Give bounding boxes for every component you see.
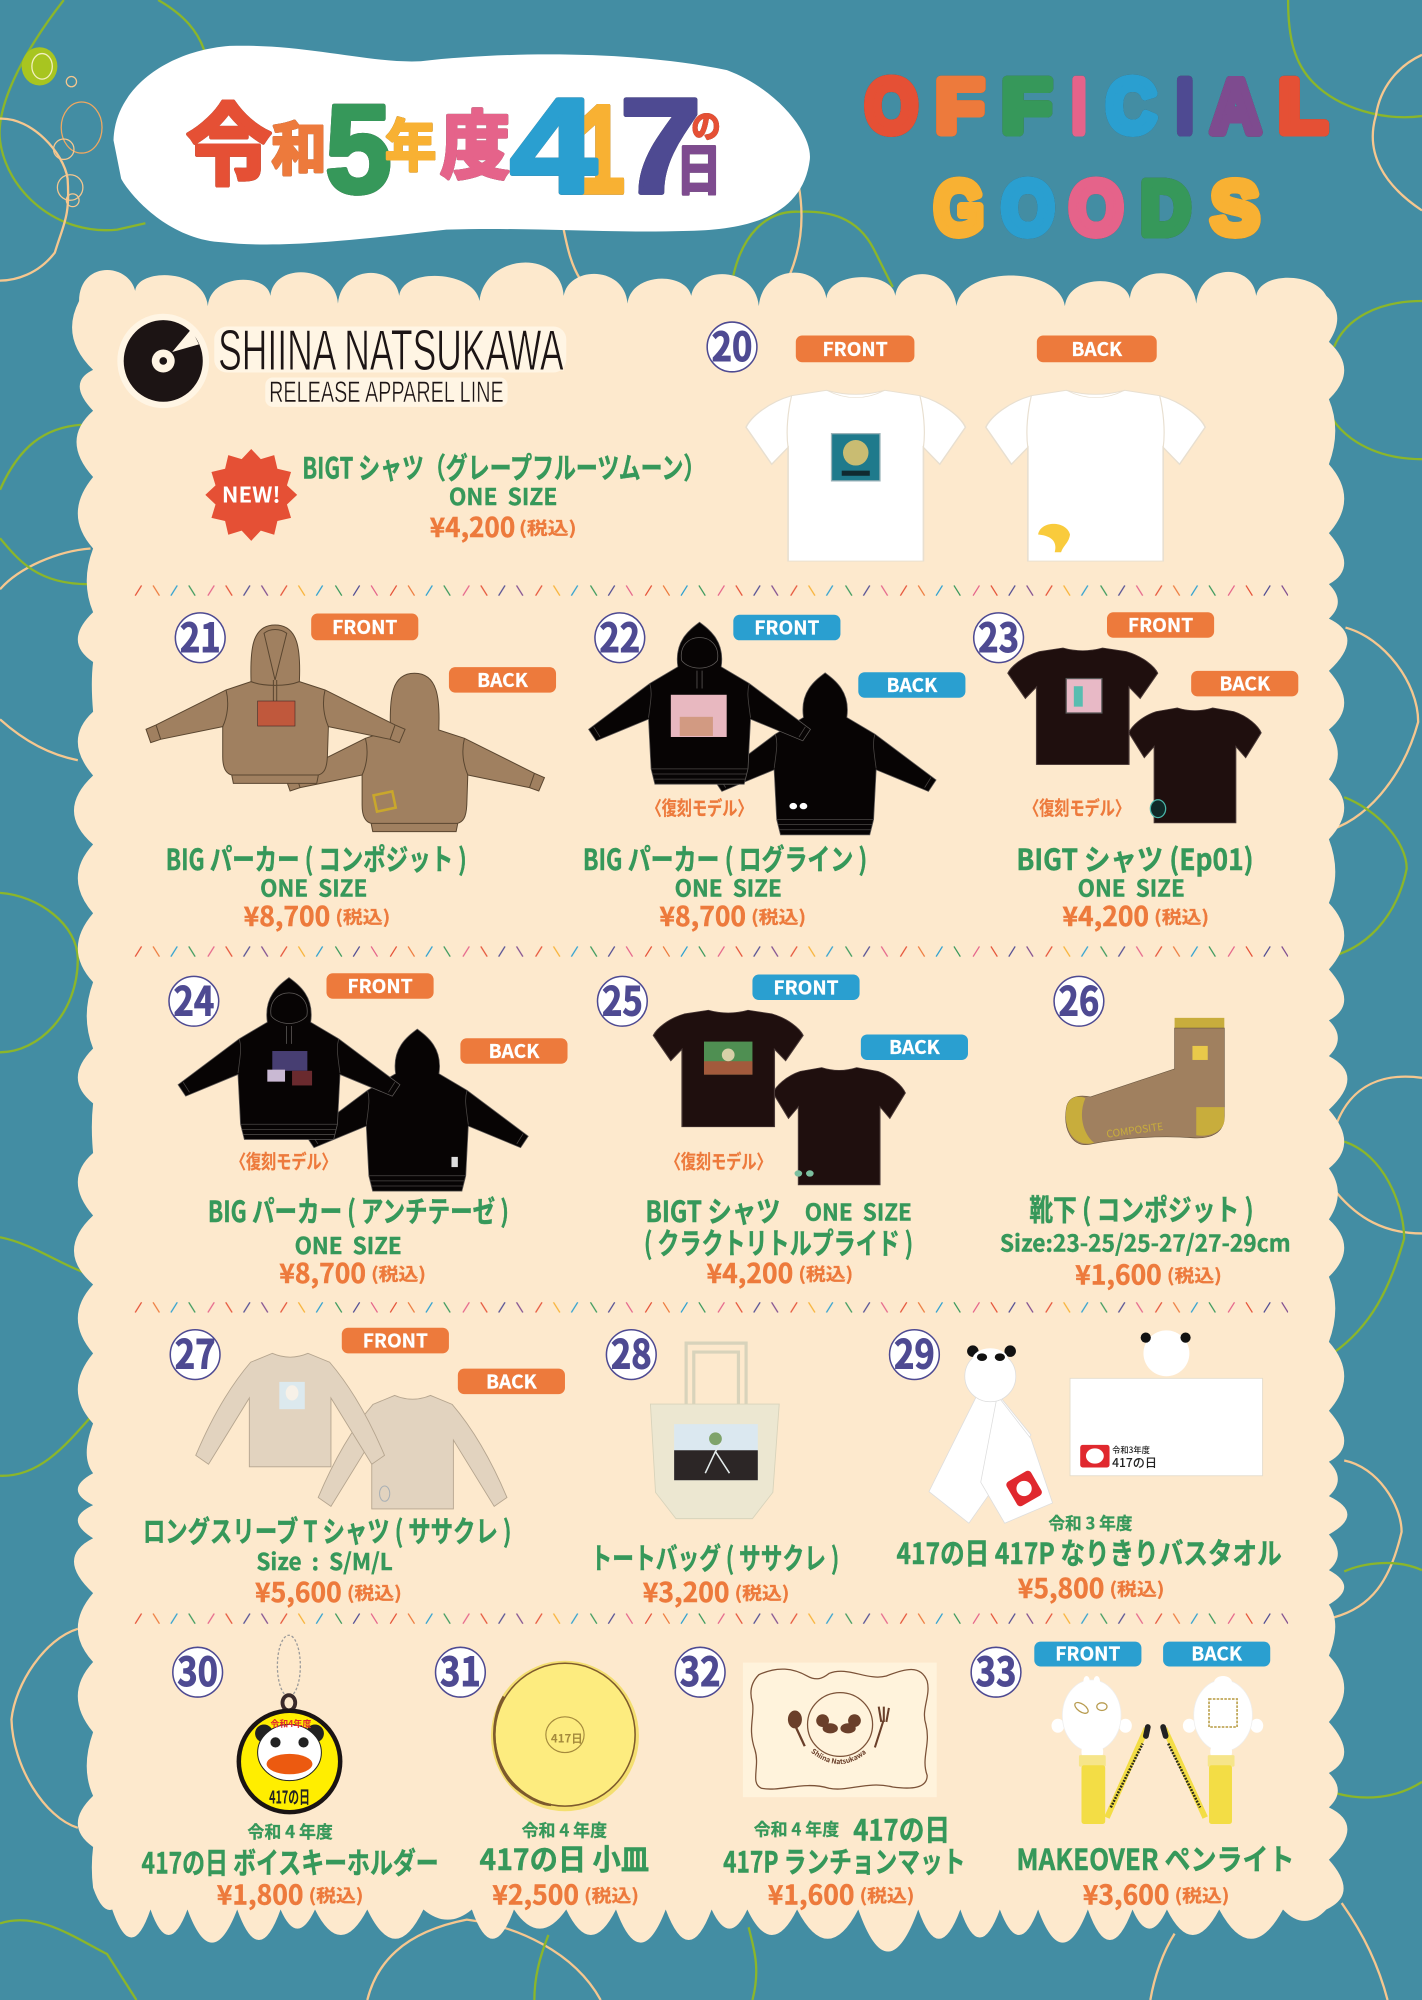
label BACK [458, 1366, 565, 1394]
label BACK: BACK [1219, 669, 1271, 697]
hoodie back [306, 1029, 528, 1191]
reissue note 24: 〈復刻モデル〉 [231, 1146, 337, 1174]
price 26 [1075, 1253, 1222, 1292]
number badge 31: 31 [440, 1641, 481, 1698]
price 26: ¥1,600 [1075, 1253, 1162, 1292]
label BACK [1163, 1639, 1270, 1667]
label FRONT: FRONT [1055, 1639, 1121, 1667]
price 22: ¥8,700 [659, 895, 746, 934]
price 33 [1083, 1873, 1229, 1912]
item 26: 靴下 コンポジット [1000, 970, 1291, 1292]
product name 24: BIG パーカー ( アンチテーゼ ) [208, 1189, 509, 1231]
number badge 23: 23 [978, 607, 1019, 664]
item 22: BIG パーカー ログライン [583, 607, 965, 934]
logo: SHIINA NATSUKAWA wordmark: RELEASE APPAREL LINE [269, 376, 504, 409]
item 23: BIGT シャツ Ep01 [974, 607, 1298, 934]
product name 25: BIGT シャツ [645, 1189, 781, 1231]
label BACK: BACK [1191, 1639, 1243, 1667]
label FRONT: FRONT [347, 971, 413, 999]
title: 令和5年度417の日: 4 [510, 71, 597, 222]
key holder [237, 1635, 342, 1814]
title: OFFICIAL GOODS: L [1279, 64, 1327, 148]
label BACK: BACK [486, 1366, 538, 1394]
product subname 25: ( クラクトリトルプライド ) [644, 1221, 913, 1263]
towel flat: 令和3年度 [1112, 1444, 1150, 1456]
item 27: ロングスリーブ T シャツ ササクレ [143, 1324, 565, 1610]
tote bag [650, 1343, 779, 1519]
label FRONT [796, 334, 914, 362]
hoodie front [146, 625, 405, 783]
price 20: ¥4,200 [430, 506, 515, 545]
towel flat [1070, 1330, 1263, 1476]
price 33: ¥3,600 [1083, 1873, 1169, 1912]
tee back [1129, 708, 1261, 823]
title: 令和5年度417の日: 度 [440, 87, 510, 194]
price 30: ¥1,800 [217, 1873, 304, 1912]
title: OFFICIAL GOODS: O [1069, 166, 1123, 250]
title: OFFICIAL GOODS: F [1002, 64, 1052, 148]
icon: lime bubble [22, 47, 57, 85]
label BACK [861, 1032, 968, 1060]
price 25: ¥4,200 [707, 1252, 793, 1291]
title: 令和5年度417の日: の [691, 102, 721, 148]
label FRONT: FRONT [754, 613, 820, 641]
logo: SHIINA NATSUKAWA wordmark: SHIINA NATSUKAWA [218, 319, 564, 383]
title: 令和5年度417の日: 5 [325, 81, 392, 220]
label FRONT: FRONT [1128, 610, 1193, 638]
product name 32: 417の日 [853, 1808, 950, 1850]
title: OFFICIAL GOODS: O [865, 64, 918, 148]
label BACK: BACK [477, 665, 529, 693]
item 28: トートバッグ ササクレ [590, 1324, 839, 1610]
label FRONT [733, 613, 840, 641]
price 20: (税込) [519, 514, 576, 540]
price 24: ¥8,700 [279, 1252, 366, 1291]
label BACK: BACK [889, 1032, 941, 1060]
title: OFFICIAL GOODS [865, 64, 1327, 250]
label FRONT [1034, 1639, 1141, 1667]
badge NEW [205, 449, 297, 541]
fiscal year 32: 令和 4 年度 [754, 1815, 839, 1840]
product name 32: 417P ランチョンマット [723, 1839, 965, 1881]
label BACK: BACK [489, 1036, 540, 1064]
hoodie front [178, 978, 400, 1140]
price 33: (税込) [1175, 1882, 1229, 1908]
item 33: MAKEOVER ペンライト [971, 1639, 1294, 1912]
price 32: ¥1,600 [768, 1873, 854, 1912]
price 21: (税込) [335, 903, 390, 929]
towel worn [929, 1345, 1053, 1523]
tee front [1008, 648, 1158, 765]
product name 32 [723, 1808, 965, 1881]
panel: cream scalloped board [72, 263, 1347, 1952]
reissue note 22: 〈復刻モデル〉 [647, 793, 752, 821]
hoodie front [589, 622, 810, 784]
tee front [653, 1010, 803, 1127]
price 27 [255, 1571, 402, 1610]
number badge 21: 21 [180, 607, 221, 664]
label FRONT [752, 972, 860, 1000]
badge NEW: NEW! [222, 479, 281, 510]
product name 22: BIG パーカー ( ログライン ) [583, 837, 867, 879]
price 28: ¥3,200 [643, 1571, 729, 1610]
price 24 [279, 1252, 426, 1291]
reissue note 25: 〈復刻モデル〉 [666, 1146, 772, 1174]
price 27: (税込) [347, 1579, 402, 1605]
price 20 [430, 506, 576, 545]
fiscal year 30: 令和 4 年度 [247, 1818, 333, 1843]
product name 29: 417の日 417P なりきりバスタオル [897, 1531, 1282, 1573]
label BACK [449, 665, 556, 693]
long sleeve front [196, 1353, 385, 1467]
number badge 25: 25 [602, 970, 643, 1027]
title: OFFICIAL GOODS: D [1141, 166, 1191, 250]
price 30 [217, 1873, 363, 1912]
divider [134, 1301, 1288, 1314]
tee back [773, 1068, 905, 1185]
towel flat: 417の日 [1112, 1454, 1157, 1471]
key holder: 令和4年度 [270, 1717, 311, 1730]
penlight back [1163, 1676, 1263, 1824]
item 31: 小皿 [436, 1641, 649, 1912]
number badge 20: 20 [712, 316, 752, 373]
label FRONT [311, 612, 418, 640]
product name 33: MAKEOVER ペンライト [1016, 1837, 1294, 1879]
product name 27: ロングスリーブ T シャツ ( ササクレ ) [143, 1509, 511, 1551]
price 22: (税込) [751, 903, 806, 929]
sock [1066, 1018, 1224, 1145]
title: OFFICIAL GOODS: I [1176, 64, 1193, 148]
size 25: ONE SIZE [805, 1194, 912, 1228]
title: OFFICIAL GOODS: C [1106, 64, 1156, 148]
sock: COMPOSITE [1105, 1118, 1164, 1141]
title: OFFICIAL GOODS: I [1072, 64, 1086, 148]
size 22: ONE SIZE [675, 870, 782, 904]
number badge 24: 24 [173, 970, 214, 1027]
key holder: 417の日 [269, 1784, 310, 1810]
number badge 29: 29 [894, 1324, 935, 1381]
price 31 [492, 1873, 639, 1912]
price 21 [244, 895, 390, 934]
title: OFFICIAL GOODS: A [1211, 64, 1261, 148]
title: 令和5年度417の日: 日 [676, 126, 722, 206]
hoodie back [714, 673, 936, 835]
title: 令和5年度417の日: 年 [385, 102, 436, 183]
size 24: ONE SIZE [295, 1227, 402, 1261]
item 20: BIGT シャツ グレープフルーツムーン [205, 316, 1205, 561]
price 22 [659, 895, 806, 934]
number badge 32: 32 [680, 1641, 721, 1698]
placemat [743, 1662, 936, 1797]
price 32 [768, 1873, 914, 1912]
price 26: (税込) [1167, 1262, 1222, 1288]
divider [134, 945, 1288, 958]
label FRONT [342, 1326, 449, 1354]
price 29: ¥5,800 [1018, 1567, 1104, 1606]
label BACK [1037, 334, 1157, 362]
item 24: BIG パーカー アンチテーゼ [169, 970, 568, 1291]
price 21: ¥8,700 [244, 895, 330, 934]
product name 23: BIGT シャツ (Ep01) [1016, 837, 1254, 879]
label BACK: BACK [1071, 334, 1123, 362]
product name 21: BIG パーカー ( コンポジット ) [166, 837, 467, 879]
product name 30: 417の日 ボイスキーホルダー [142, 1841, 439, 1883]
item 30: ボイスキーホルダー [142, 1635, 439, 1912]
label FRONT: FRONT [773, 972, 839, 1000]
label FRONT: FRONT [822, 334, 888, 362]
price 31: (税込) [584, 1882, 639, 1908]
price 32: (税込) [860, 1882, 914, 1908]
divider [134, 584, 1288, 597]
item 25: BIGT シャツ クラクトリトルプライド [597, 970, 968, 1291]
size 21: ONE SIZE [260, 870, 367, 904]
product name 20: BIGT シャツ（グレープフルーツムーン） [302, 445, 705, 487]
product name 26: 靴下 ( コンポジット ) [1029, 1188, 1254, 1230]
price 25 [707, 1252, 853, 1291]
hoodie back [285, 673, 544, 832]
number badge 28: 28 [611, 1324, 652, 1381]
price 28: (税込) [735, 1579, 789, 1605]
price 23: (税込) [1154, 903, 1209, 929]
number badge 27: 27 [175, 1324, 216, 1381]
label FRONT [1107, 610, 1214, 638]
price 24: (税込) [371, 1261, 426, 1287]
label FRONT: FRONT [332, 612, 397, 640]
item 29: なりきりバスタオル [890, 1324, 1282, 1606]
label BACK [858, 670, 965, 698]
title: 令和5年度417の日 [186, 71, 722, 222]
item 32: ランチョンマット [674, 1641, 965, 1912]
plate: 417日 [551, 1730, 583, 1746]
number badge 30: 30 [177, 1641, 218, 1698]
placemat: Shiina Natsukawa [811, 1748, 866, 1764]
product name 31: 417の日 小皿 [480, 1837, 649, 1879]
number badge 26: 26 [1059, 970, 1099, 1027]
label FRONT: FRONT [363, 1326, 428, 1354]
price 28 [643, 1571, 789, 1610]
size 23: ONE SIZE [1078, 870, 1185, 904]
plate [491, 1661, 639, 1811]
number badge 33: 33 [976, 1641, 1016, 1698]
fiscal year 31: 令和 4 年度 [522, 1817, 607, 1842]
product name 28: トートバッグ ( ササクレ ) [590, 1536, 839, 1578]
divider [134, 1612, 1288, 1625]
size 20: ONE SIZE [449, 478, 557, 512]
price 23: ¥4,200 [1062, 895, 1149, 934]
price 29: (税込) [1110, 1576, 1164, 1602]
label BACK [460, 1036, 568, 1064]
title: 令和5年度417の日: 7 [620, 71, 701, 222]
price 23 [1062, 895, 1209, 934]
panel: title cloud [114, 46, 810, 244]
price 31: ¥2,500 [492, 1873, 579, 1912]
fiscal year 29: 令和 3 年度 [1048, 1509, 1132, 1534]
reissue note 23: 〈復刻モデル〉 [1024, 793, 1130, 821]
label FRONT [326, 971, 434, 999]
price 29 [1018, 1567, 1164, 1606]
size 27: Size : S/M/L [256, 1543, 393, 1577]
price 25: (税込) [798, 1261, 853, 1287]
item 21: BIG パーカー コンポジット [146, 607, 556, 934]
penlight front [1052, 1676, 1148, 1824]
title: OFFICIAL GOODS: F [935, 64, 984, 148]
title: OFFICIAL GOODS: G [934, 166, 984, 250]
tee front [746, 390, 965, 561]
tee back [986, 390, 1205, 561]
label BACK: BACK [887, 670, 938, 698]
number badge 22: 22 [599, 607, 640, 664]
title: 令和5年度417の日: 令 [186, 73, 272, 203]
label BACK [1191, 669, 1298, 697]
logo: record icon [117, 314, 209, 408]
price 30: (税込) [309, 1882, 363, 1908]
title: 令和5年度417の日: 1 [576, 81, 625, 220]
title: OFFICIAL GOODS: O [1002, 166, 1054, 250]
title: 令和5年度417の日: 和 [272, 103, 326, 187]
title: OFFICIAL GOODS: S [1211, 166, 1259, 250]
logo: SHIINA NATSUKAWA wordmark [214, 319, 566, 409]
long sleeve back [318, 1395, 507, 1509]
size 26: Size:23-25/25-27/27-29cm [1000, 1224, 1291, 1258]
price 27: ¥5,600 [255, 1571, 342, 1610]
